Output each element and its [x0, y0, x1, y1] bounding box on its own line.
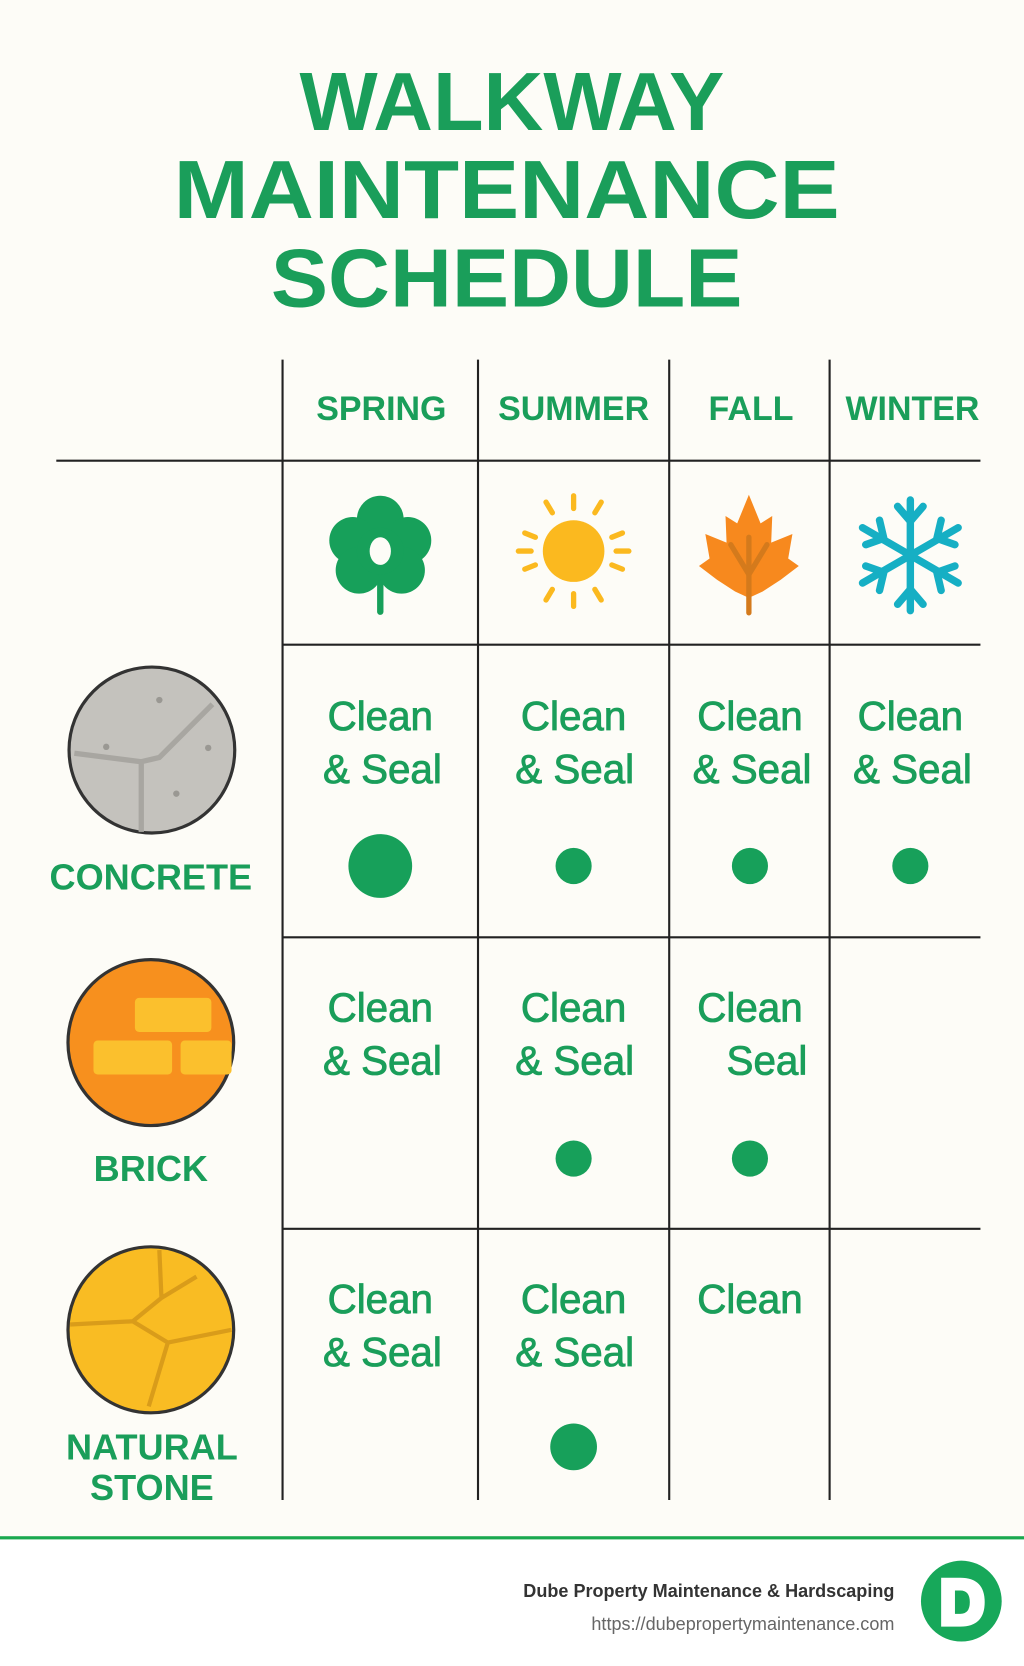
footer: Dube Property Maintenance & Hardscaping	[523, 1581, 894, 1601]
title	[174, 55, 840, 324]
schedule cells: & Seal	[515, 1329, 634, 1375]
dots	[348, 834, 928, 1470]
material: natural stone: STONE	[90, 1467, 214, 1508]
title: MAINTENANCE	[174, 143, 840, 236]
season headers	[316, 390, 979, 428]
schedule cells: Clean	[697, 693, 803, 739]
schedule cells: Clean	[521, 693, 626, 739]
icon: sun	[518, 496, 629, 606]
schedule cells: Clean	[328, 693, 433, 739]
material: natural stone: NATURAL	[66, 1427, 238, 1468]
season headers: WINTER	[845, 390, 979, 428]
material: concrete	[50, 667, 252, 897]
schedule cells: & Seal	[515, 1037, 634, 1084]
schedule cells: & Seal	[323, 1329, 442, 1375]
schedule cells: Clean	[521, 984, 626, 1030]
material: brick: BRICK	[94, 1148, 208, 1189]
icon: flower	[329, 496, 431, 615]
schedule cells: Clean	[328, 1276, 433, 1322]
schedule cells: & Seal	[853, 746, 972, 792]
season headers: SUMMER	[498, 390, 649, 428]
material: concrete: CONCRETE	[50, 856, 252, 897]
icon: snowflake	[863, 500, 958, 611]
schedule cells: & Seal	[693, 746, 812, 792]
title: WALKWAY	[300, 55, 724, 148]
schedule cells: Clean	[521, 1276, 626, 1322]
schedule cells: Clean	[328, 984, 433, 1030]
schedule cells: & Seal	[323, 1037, 442, 1084]
footer	[0, 1536, 1024, 1666]
schedule cells	[323, 693, 972, 1375]
season headers: FALL	[709, 390, 793, 428]
schedule cells: & Seal	[515, 746, 634, 792]
schedule cells: Clean	[697, 984, 803, 1030]
schedule cells: Clean	[858, 693, 963, 739]
icon: leaf	[699, 495, 799, 613]
footer: https://dubepropertymaintenance.com	[591, 1614, 894, 1634]
title: SCHEDULE	[271, 231, 743, 324]
schedule cells: & Seal	[323, 746, 442, 792]
season headers: SPRING	[316, 390, 446, 428]
material: brick	[68, 960, 234, 1189]
schedule cells: Seal	[727, 1037, 807, 1084]
schedule cells: Clean	[697, 1276, 803, 1322]
material: natural stone	[66, 1247, 238, 1508]
